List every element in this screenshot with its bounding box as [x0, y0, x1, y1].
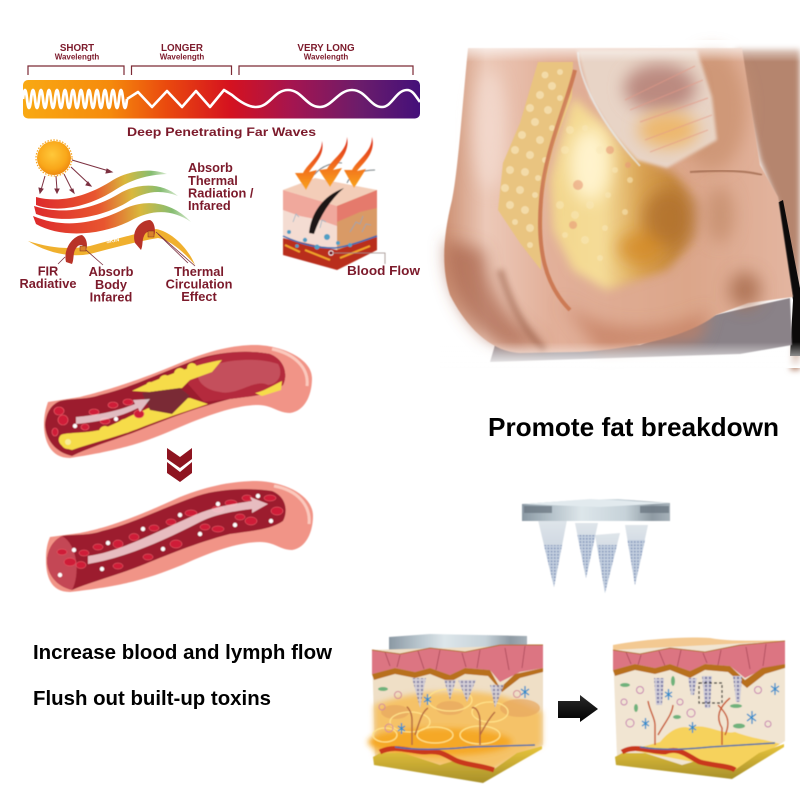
- text: absorb thermal radiation: Thermal: [188, 173, 238, 188]
- icon: black arrow: [558, 695, 598, 722]
- base layer: [373, 746, 542, 783]
- dermis body: [372, 645, 543, 778]
- red blood cells: [52, 399, 144, 436]
- pink epidermis: [613, 641, 785, 678]
- text: blood flow: Blood Flow: [347, 263, 420, 278]
- skin cube with heat flames: [283, 137, 385, 270]
- highlight: [274, 486, 309, 524]
- text: thermal circulation effect: Effect: [181, 289, 218, 304]
- text: thermal circulation effect: Thermal: [174, 264, 224, 279]
- label: very long wavelength: [297, 43, 355, 62]
- wave spectrum band: [23, 80, 420, 118]
- clot region: [188, 352, 285, 402]
- lumen: [45, 352, 285, 456]
- label: longer wavelength: Wavelength: [160, 52, 204, 62]
- label: longer wavelength: LONGER: [161, 43, 203, 54]
- label: short wavelength: Wavelength: [55, 52, 99, 62]
- torso skin: [444, 48, 793, 353]
- upper right abdomen shade: [678, 50, 746, 170]
- icon: sun with rays: [36, 140, 112, 193]
- platelets: [73, 424, 77, 428]
- text: increase blood and lymph flow: Increase blood and lymph flow: [33, 641, 332, 664]
- label: short wavelength: SHORT: [60, 43, 94, 54]
- fat lumps: [630, 726, 780, 770]
- artery wall: [44, 345, 312, 458]
- fat strip cross section: [498, 62, 573, 270]
- text: thermal circulation effect: [166, 264, 233, 304]
- blood vessels: [407, 707, 495, 745]
- patch plate: [389, 634, 527, 650]
- needles in skin: [412, 678, 504, 708]
- skin cube after treatment: [613, 637, 785, 779]
- photo: abdomen with exposed fat layer: [440, 40, 800, 370]
- dissolved needle particles: [654, 676, 742, 708]
- text: FIR radiative: Radiative: [20, 276, 76, 291]
- artery wall: [46, 481, 313, 592]
- label: longer wavelength: [160, 43, 204, 62]
- blue star cells: [642, 683, 779, 733]
- text: flush out built-up toxins: Flush out built-up toxins: [33, 687, 271, 710]
- exposed fat mass: [550, 97, 700, 290]
- heading: deep penetrating far waves: Deep Penetrating Far Waves: [127, 125, 316, 139]
- translucent peeled skin flap: [577, 50, 717, 168]
- text: absorb body infared: Infared: [90, 290, 132, 304]
- text: absorb thermal radiation: [188, 160, 254, 213]
- dermis body: [613, 641, 785, 776]
- flow arrow: [76, 399, 150, 424]
- warm fat cells: [374, 692, 542, 775]
- red blood cells: [57, 495, 283, 569]
- skin band with FIR clamps: [28, 220, 195, 266]
- green cell: [378, 687, 388, 691]
- skin band with FIR clamps: SKIN: [106, 237, 120, 245]
- skin cube with patch applied: [368, 634, 543, 783]
- highlight: [272, 349, 307, 386]
- thermal radiation ribbons: [33, 171, 191, 233]
- icon: double chevron down: [167, 448, 192, 482]
- lower shadow folds: [446, 70, 761, 352]
- green cells: [620, 676, 745, 728]
- text: absorb body infared: [89, 264, 134, 304]
- label: short wavelength: [55, 43, 99, 62]
- lumen: [47, 489, 286, 590]
- text: absorb thermal radiation: Absorb: [188, 160, 233, 175]
- soft white fades at top and bottom: [440, 40, 800, 62]
- label: very long wavelength: Wavelength: [304, 52, 348, 62]
- brackets: [28, 66, 413, 75]
- text: absorb thermal radiation: Radiation /: [188, 186, 254, 200]
- pink epidermis: [372, 645, 543, 682]
- artery with plaque: [44, 345, 312, 458]
- plaque bottom: [59, 397, 208, 450]
- base layer: [615, 744, 784, 779]
- text: FIR radiative: FIR: [38, 264, 58, 278]
- text: thermal circulation effect: Circulation: [166, 276, 233, 292]
- heading: promote fat breakdown: Promote fat breakdown: [488, 412, 779, 442]
- round cells: [379, 690, 520, 732]
- text: FIR radiative: [20, 264, 76, 291]
- skin top: [613, 637, 785, 660]
- text: absorb body infared: Absorb: [89, 264, 134, 279]
- icon: microneedle patch: [522, 499, 670, 593]
- flow arrow: [88, 497, 268, 564]
- healthy artery: [46, 481, 313, 592]
- dashed selection box: [699, 683, 722, 703]
- text: absorb thermal radiation: Infared: [188, 198, 231, 213]
- label: very long wavelength: VERY LONG: [297, 43, 355, 54]
- blockage debris: [142, 388, 190, 414]
- waistband: [490, 298, 792, 362]
- platelets: [58, 494, 273, 577]
- wavelength labels and brackets: [28, 43, 413, 75]
- arm and dark clothing at right: [735, 48, 800, 370]
- blue star cells: [398, 686, 529, 734]
- plaque top: [132, 360, 222, 392]
- round cells: [621, 686, 771, 727]
- blood vessels: [648, 698, 730, 745]
- text: absorb body infared: Body: [95, 277, 128, 292]
- incision edge: [540, 70, 575, 310]
- fold crease: [500, 270, 545, 350]
